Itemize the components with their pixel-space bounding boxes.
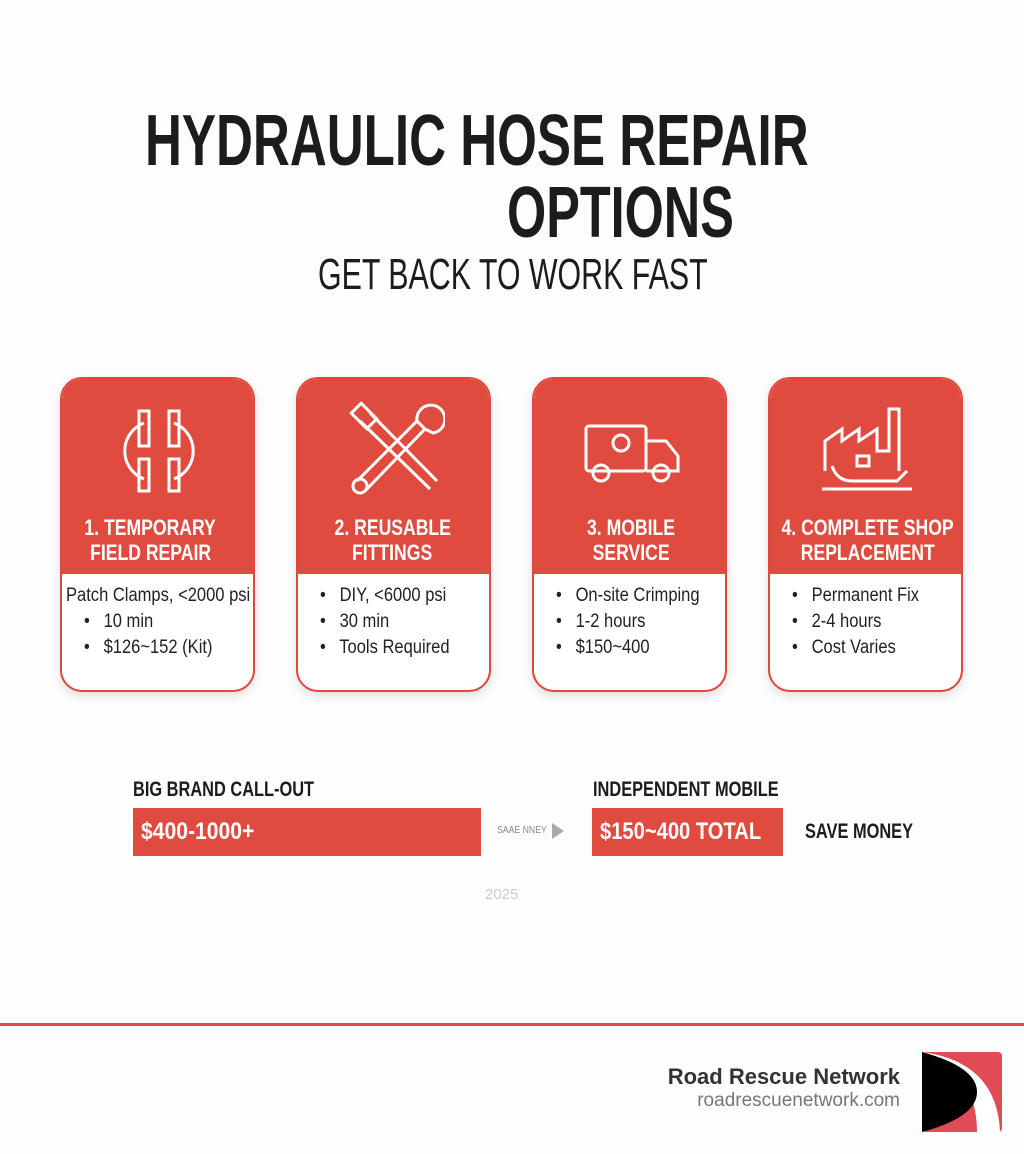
card 2: • Tools Required (320, 637, 450, 658)
card 2: FITTINGS (352, 540, 433, 565)
card 3: SERVICE (593, 540, 670, 565)
card 3: • 1-2 hours (556, 611, 645, 632)
icon: factory (822, 408, 912, 490)
comparison: $150~400 TOTAL (600, 818, 761, 845)
card 2 (296, 377, 491, 692)
card 4: REPLACEMENT (801, 540, 934, 565)
footer brand: Road Rescue Network (668, 1064, 900, 1089)
card 2: • 30 min (320, 611, 389, 632)
icon: clamp (123, 410, 195, 492)
card 4: 4. COMPLETE SHOP (781, 515, 954, 540)
card 4: • 2-4 hours (792, 611, 881, 632)
card 1: • $126~152 (Kit) (84, 637, 212, 658)
comparison: INDEPENDENT MOBILE (593, 778, 779, 801)
card 4 (768, 377, 963, 692)
icon: truck (584, 424, 680, 482)
card 2: 2. REUSABLE (334, 515, 451, 540)
card 1: FIELD REPAIR (90, 540, 211, 565)
logo (922, 1052, 1002, 1132)
comparison: BIG BRAND CALL-OUT (133, 778, 314, 801)
card 1: • 10 min (84, 611, 153, 632)
comparison: SAAE NNEY (497, 825, 547, 836)
comparison: $400-1000+ (141, 818, 254, 845)
title (145, 101, 809, 253)
card 1 (60, 377, 255, 692)
comparison: SAVE MONEY (805, 820, 913, 843)
card 4: • Permanent Fix (792, 585, 919, 606)
card 4: • Cost Varies (792, 637, 896, 658)
footer brand: roadrescuenetwork.com (697, 1090, 900, 1111)
title: HYDRAULIC HOSE REPAIR (145, 101, 809, 181)
icon: tools (349, 401, 445, 494)
card 3: 3. MOBILE (587, 515, 675, 540)
comparison (133, 778, 913, 856)
card 3: • On-site Crimping (556, 585, 700, 606)
title: OPTIONS (507, 173, 734, 253)
card 1: 1. TEMPORARY (85, 515, 216, 540)
footer brand (668, 1064, 900, 1111)
card 3: • $150~400 (556, 637, 650, 658)
card 1: Patch Clamps, <2000 psi (66, 585, 250, 606)
card 2: • DIY, <6000 psi (320, 585, 446, 606)
year: 2025 (485, 886, 518, 903)
card 3 (532, 377, 727, 692)
subtitle: GET BACK TO WORK FAST (318, 250, 708, 299)
